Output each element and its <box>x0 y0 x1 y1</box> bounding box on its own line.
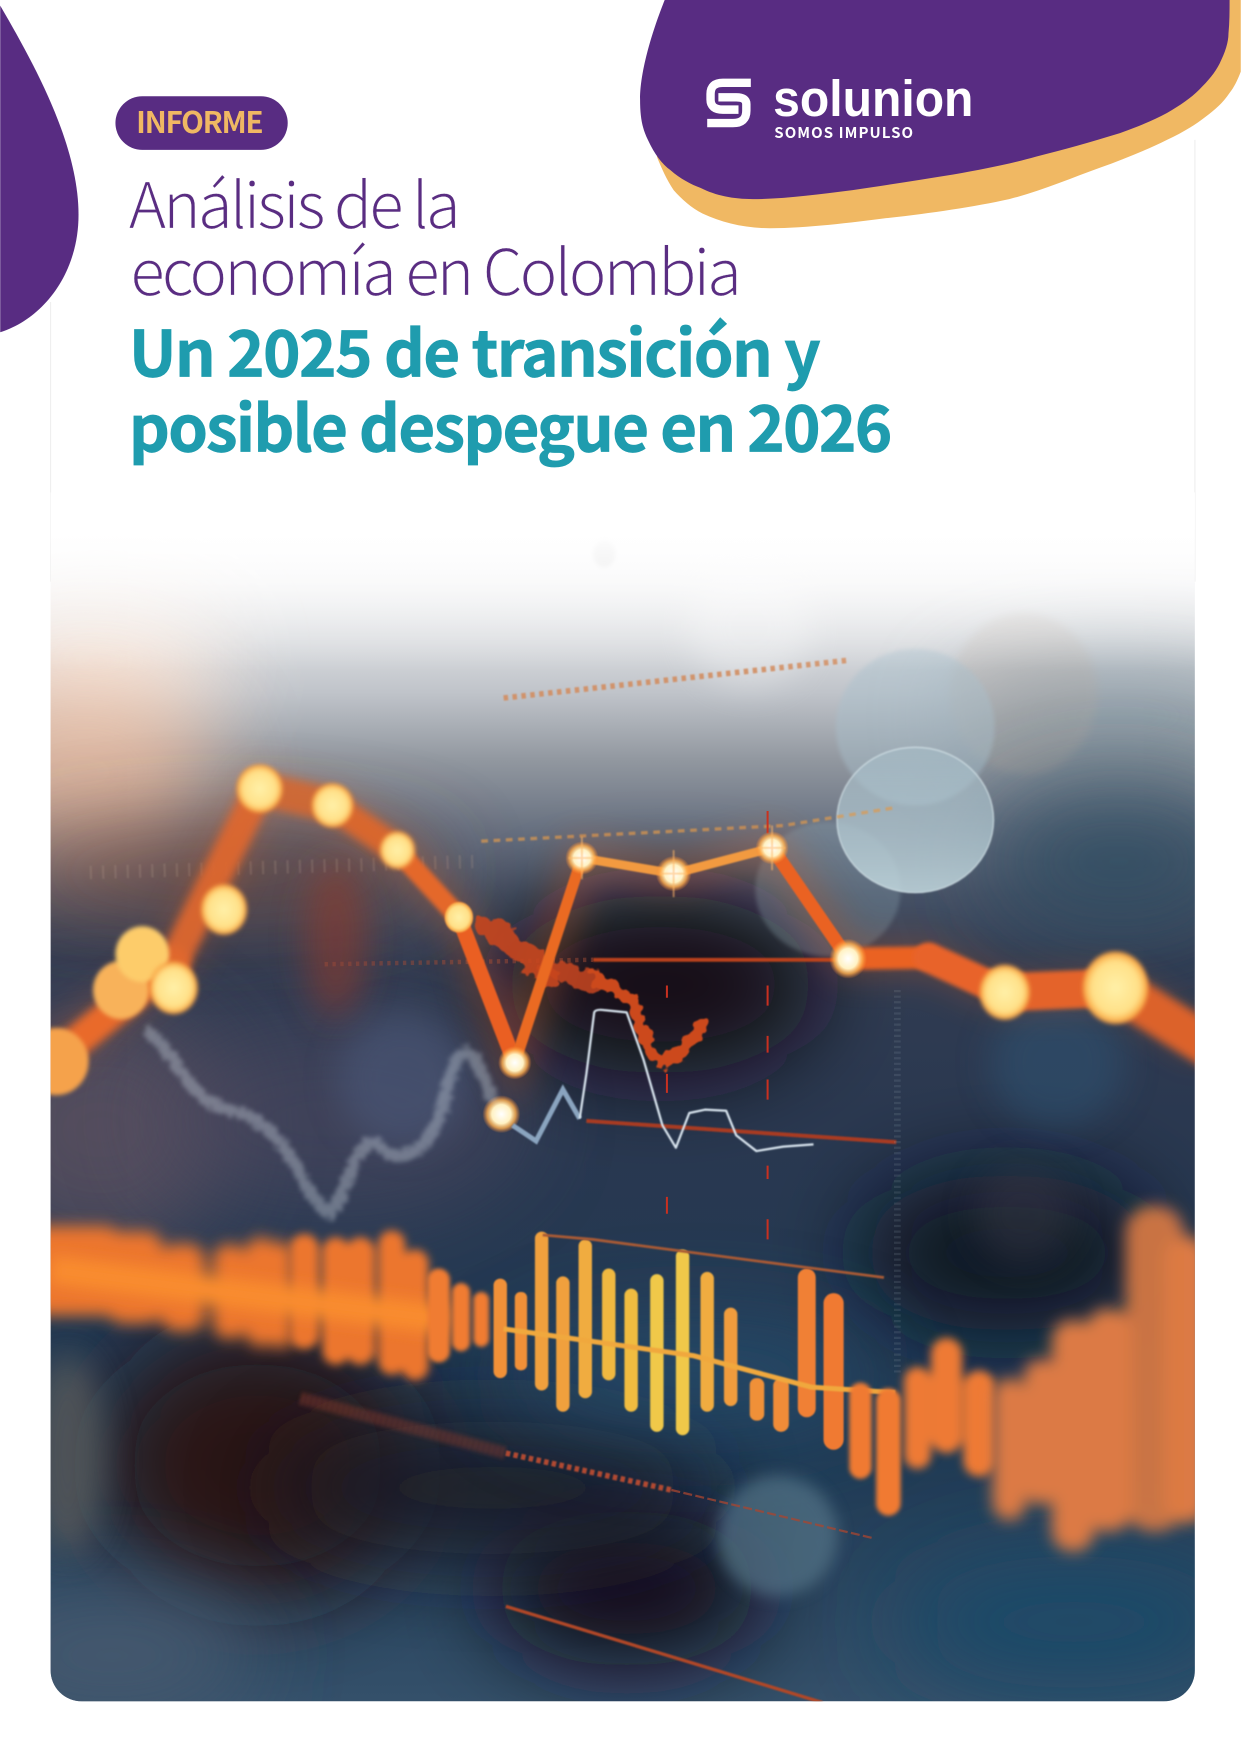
left mid blurred bars <box>290 1230 429 1380</box>
left blurred orange bars <box>34 1226 293 1348</box>
bokeh circles <box>593 540 1098 1596</box>
right blurred orange bars <box>849 1383 901 1516</box>
title: light purple heading: Análisis de la <box>129 156 461 247</box>
decorative shape: left purple blob <box>0 6 79 332</box>
central connecting line and top line <box>504 1235 895 1393</box>
red dotted diagonal line <box>301 1398 873 1538</box>
sharp white chart line <box>580 1010 813 1151</box>
logo: solunion <box>707 69 973 143</box>
white fade at top of photo <box>51 539 1194 661</box>
core highlight of left bars <box>51 1270 448 1320</box>
logo wordmark: solunion <box>773 69 973 127</box>
title: light purple heading <box>129 156 742 314</box>
blurred white squiggle line <box>146 1029 492 1214</box>
red candlestick cluster <box>489 926 703 1063</box>
mid orange bars <box>428 1269 489 1362</box>
sharp central bars <box>494 1232 844 1450</box>
lower red line <box>506 1606 822 1703</box>
subtitle: bold teal heading <box>129 303 892 470</box>
badge: INFORME: INFORME <box>136 99 264 142</box>
photo base gradient <box>51 492 1195 1701</box>
photo tonal background <box>50 610 1195 1702</box>
title: light purple heading: economía en Colombia <box>131 223 742 314</box>
logo tagline: SOMOS IMPULSO <box>774 122 913 143</box>
subtitle: bold teal heading: posible despegue en 2026 <box>129 378 892 470</box>
right mid blurred bars <box>904 1338 995 1477</box>
subtitle: bold teal heading: Un 2025 de transición y <box>129 303 821 395</box>
decorative shape: top right orange and purple blob <box>640 0 1241 228</box>
far right very blurred bars <box>992 1206 1208 1552</box>
badge: INFORME <box>115 96 288 150</box>
glowing orange line chart <box>51 789 1208 1063</box>
dotted guide lines <box>90 660 897 1376</box>
glowing points on line chart <box>24 764 1149 1133</box>
photo panel: financial chart with glowing lines <box>0 492 1241 1723</box>
icon: solunion S mark <box>707 83 751 123</box>
glow under orange line chart <box>51 789 1208 1063</box>
sharp chart line, left thick section <box>513 1090 580 1141</box>
page panel side edges <box>51 140 1195 582</box>
